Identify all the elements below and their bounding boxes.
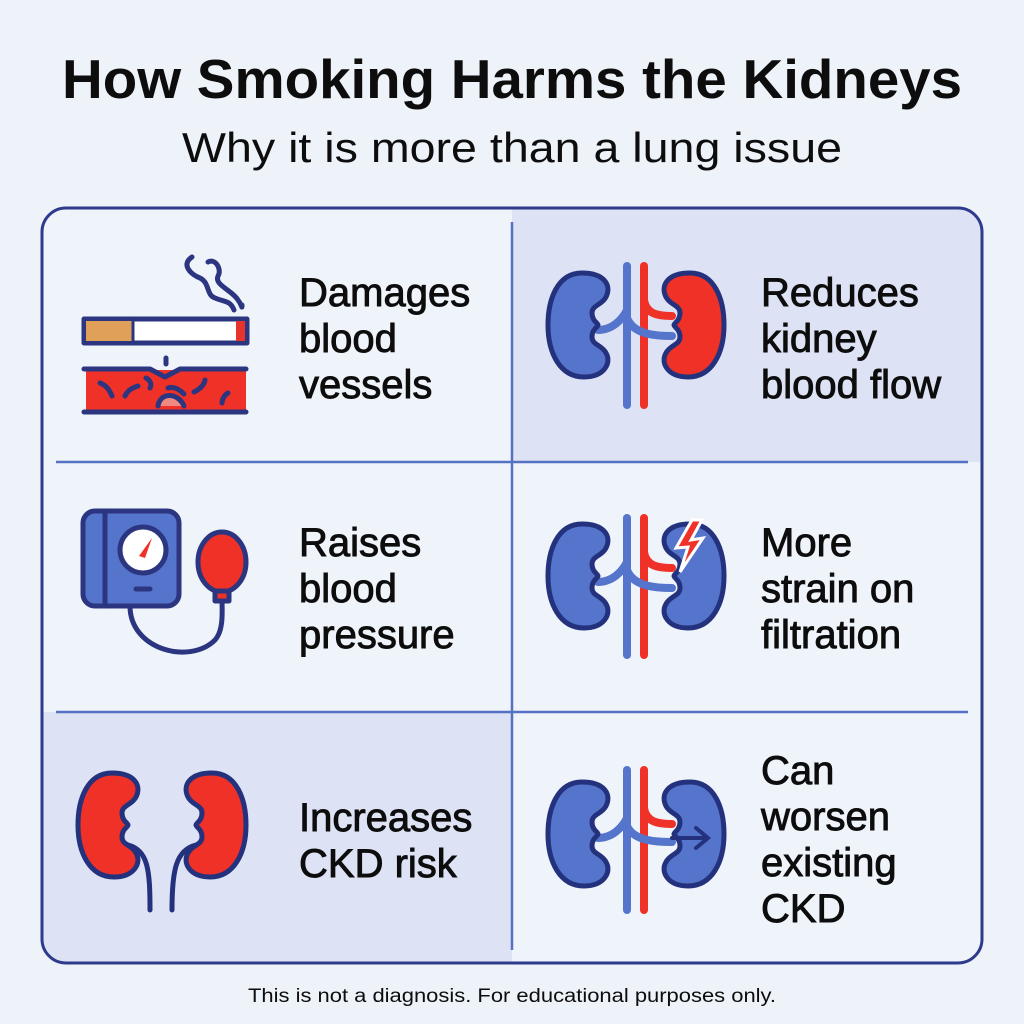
text: reduces kidney blood flow: blood flow: [761, 363, 941, 407]
text: increases CKD risk: CKD risk: [299, 842, 458, 886]
text: more strain on filtration: More: [761, 521, 852, 565]
text: can worsen existing CKD: Can: [761, 749, 834, 793]
footer disclaimer: This is not a diagnosis. For educational purposes only.: [248, 986, 776, 1007]
icon: kidneys blood flow: [548, 266, 724, 405]
text: can worsen existing CKD: existing: [761, 841, 897, 885]
title: How Smoking Harms the Kidneys: [62, 48, 962, 110]
icon: red kidneys CKD: [78, 773, 246, 910]
text: damages blood vessels: blood: [299, 317, 397, 361]
text: raises blood pressure: pressure: [299, 613, 455, 657]
icon: kidneys worsening: [548, 770, 724, 910]
icon: cigarette and damaged vessel: [84, 257, 247, 412]
text: raises blood pressure: blood: [299, 567, 397, 611]
text: reduces kidney blood flow: kidney: [761, 317, 877, 361]
text: raises blood pressure: Raises: [299, 521, 421, 565]
text: can worsen existing CKD: worsen: [760, 795, 890, 839]
icon: kidneys strain: [548, 518, 724, 655]
icon: blood pressure monitor: [83, 511, 246, 652]
text: damages blood vessels: Damages: [299, 271, 470, 315]
text: can worsen existing CKD: CKD: [761, 887, 845, 931]
panel: grid: [42, 208, 982, 963]
text: damages blood vessels: vessels: [299, 363, 432, 407]
text: reduces kidney blood flow: Reduces: [761, 271, 919, 315]
subtitle: Why it is more than a lung issue: [182, 124, 842, 171]
text: increases CKD risk: Increases: [299, 796, 472, 840]
text: more strain on filtration: strain on: [761, 567, 914, 611]
text: more strain on filtration: filtration: [761, 613, 901, 657]
